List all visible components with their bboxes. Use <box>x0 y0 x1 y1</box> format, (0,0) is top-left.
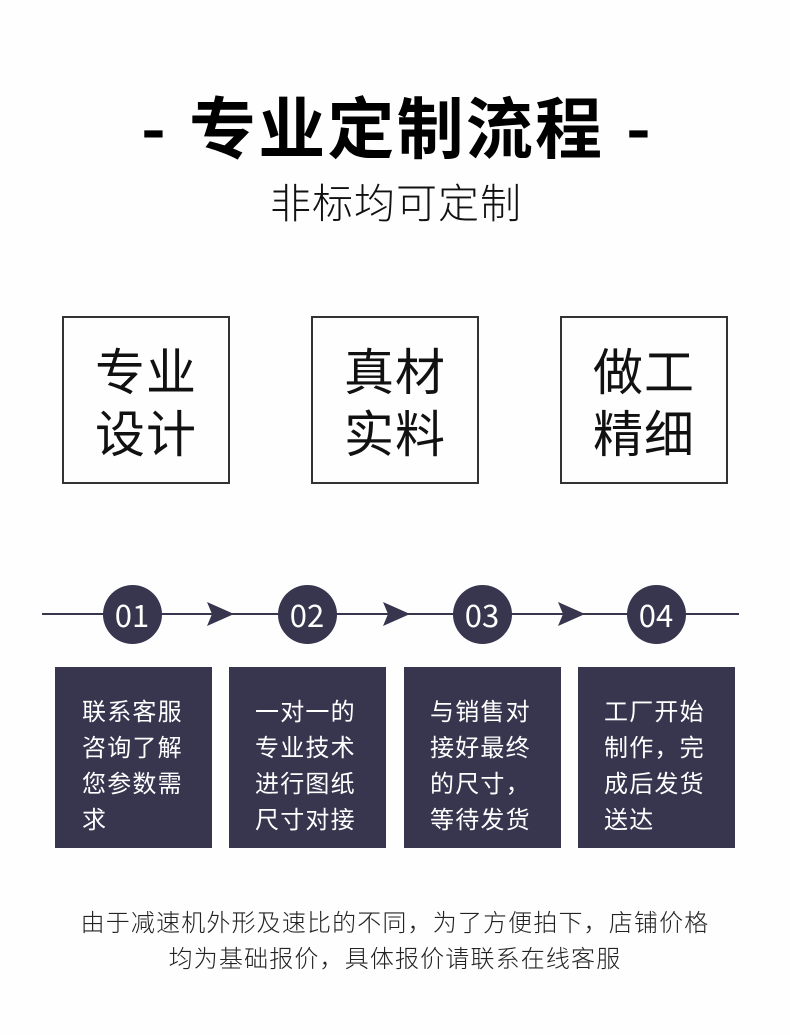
box: real materials: 实料 <box>344 395 446 467</box>
title: - <box>626 76 651 173</box>
step number 02 <box>278 585 337 644</box>
card: step 1: 咨询了解 <box>82 728 183 763</box>
subtitle: 非标均可定制 <box>270 170 522 230</box>
card: step 2 <box>229 667 386 848</box>
step number 03 <box>453 585 512 644</box>
card: step 3: 等待发货 <box>430 800 531 835</box>
box: real materials: 真材 <box>344 333 446 405</box>
step number 01 <box>103 585 162 644</box>
card: step 3 <box>404 667 561 848</box>
card: step 3: 与销售对 <box>430 692 531 727</box>
title: 专业定制流程 <box>189 76 604 173</box>
card: step 4 <box>578 667 735 848</box>
card: step 2: 一对一的 <box>255 692 356 727</box>
step number 03: 03 <box>465 591 499 636</box>
card: step 2: 尺寸对接 <box>255 800 356 835</box>
box: professional design: 设计 <box>95 395 197 467</box>
card: step 4: 成后发货 <box>604 764 705 799</box>
card: step 3: 的尺寸， <box>430 764 531 799</box>
footer note: 均为基础报价，具体报价请联系在线客服 <box>169 939 621 974</box>
footer note <box>81 903 709 974</box>
step number 04 <box>627 585 686 644</box>
card: step 1: 联系客服 <box>82 692 183 727</box>
box: fine workmanship: 做工 <box>593 333 695 405</box>
card: step 1: 求 <box>82 800 107 835</box>
card: step 1 <box>55 667 212 848</box>
box: professional design <box>62 316 230 484</box>
card: step 1: 您参数需 <box>82 764 183 799</box>
card: step 3: 接好最终 <box>430 728 531 763</box>
step number 04: 04 <box>639 591 673 636</box>
step number 01: 01 <box>115 591 149 636</box>
step number 02: 02 <box>290 591 324 636</box>
box: fine workmanship <box>560 316 728 484</box>
title: - <box>141 76 166 173</box>
card: step 4: 工厂开始 <box>604 692 705 727</box>
box: real materials <box>311 316 479 484</box>
box: fine workmanship: 精细 <box>593 395 695 467</box>
card: step 4: 制作，完 <box>604 728 705 763</box>
card: step 2: 进行图纸 <box>255 764 356 799</box>
card: step 4: 送达 <box>604 800 654 835</box>
footer note: 由于减速机外形及速比的不同，为了方便拍下，店铺价格 <box>81 903 709 938</box>
box: professional design: 专业 <box>95 333 197 405</box>
process line with arrows <box>42 602 739 626</box>
card: step 2: 专业技术 <box>255 728 356 763</box>
